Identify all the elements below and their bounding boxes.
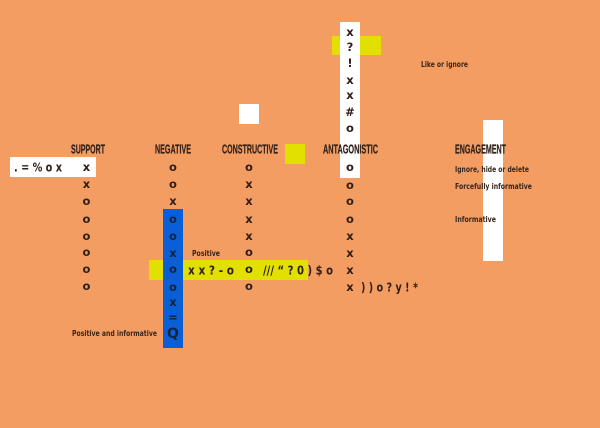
negative column symbols: o [169,212,177,226]
support column symbols: x [83,177,91,191]
column headings: ENGAGEMENT [455,142,506,156]
column headings: NEGATIVE [155,142,191,156]
antagonistic column symbols: o [346,121,354,135]
yellow square block [285,144,305,164]
negative column symbols: o [169,280,177,294]
constructive column symbols: o [245,160,253,174]
antagonistic column symbols: x [346,73,354,87]
constructive column symbols [245,160,253,293]
negative column symbols: x [169,295,177,309]
support column symbols: o [83,245,91,259]
antagonistic column symbols: x [346,280,354,294]
support column symbols: o [83,279,91,293]
constructive column symbols: o [245,262,253,276]
support column symbols: o [83,212,91,226]
antagonistic column symbols: ? [347,40,353,54]
antagonistic column symbols: o [346,160,354,174]
row symbol strings: x x ? - o [188,262,234,278]
support column symbols: o [83,229,91,243]
antagonistic column symbols: x [346,263,354,277]
negative column symbols: o [169,229,177,243]
support column symbols [14,160,91,293]
antagonistic column symbols: # [345,105,355,119]
column headings: ANTAGONISTIC [323,142,378,156]
constructive column symbols: x [245,177,253,191]
negative column symbols: o [169,160,177,174]
negative column symbols: x [169,194,177,208]
white column: antagonistic [340,22,360,178]
support column symbols: o [83,262,91,276]
engagement labels: Ignore, hide or delete [455,165,529,174]
constructive column symbols: o [245,279,253,293]
white bar: support row [10,157,96,177]
antagonistic column symbols: o [346,212,354,226]
yellow bar: middle row [149,260,308,280]
antagonistic column symbols: x [346,246,354,260]
column headings: CONSTRUCTIVE [222,142,278,156]
row symbol strings: /// “ ? 0 ) $ o [263,262,333,278]
negative column symbols: o [169,262,177,276]
constructive column symbols: o [245,245,253,259]
engagement labels: Informative [455,215,496,224]
engagement labels: Positive and informative [72,329,157,338]
support column symbols: . = % o x [14,160,62,174]
constructive column symbols: x [245,229,253,243]
engagement labels: Forcefully informative [455,182,532,191]
row symbol strings [188,262,418,294]
antagonistic column symbols: o [346,194,354,208]
support column symbols: x [83,160,91,174]
antagonistic column symbols: x [346,25,354,39]
engagement labels: Positive [192,249,220,258]
blue column: negative [163,209,183,348]
antagonistic column symbols: x [346,229,354,243]
constructive column symbols: x [245,212,253,226]
yellow bar: top [332,36,381,55]
white square block [239,104,259,124]
engagement labels [72,60,532,338]
row symbol strings: ) ) o ? y ! * [361,280,418,294]
antagonistic column symbols: o [346,178,354,192]
engagement labels: Like or ignore [421,60,468,69]
negative column symbols: x [169,246,177,260]
support column symbols: o [83,194,91,208]
negative column symbols: Q [167,326,179,342]
antagonistic column symbols: ! [347,56,353,70]
column headings [71,142,506,156]
antagonistic column symbols [345,25,355,294]
negative column symbols: = [168,310,178,324]
antagonistic column symbols: x [346,88,354,102]
negative column symbols: o [169,177,177,191]
negative column symbols [167,160,179,342]
column headings: SUPPORT [71,142,105,156]
white column: engagement [483,120,503,261]
constructive column symbols: x [245,194,253,208]
